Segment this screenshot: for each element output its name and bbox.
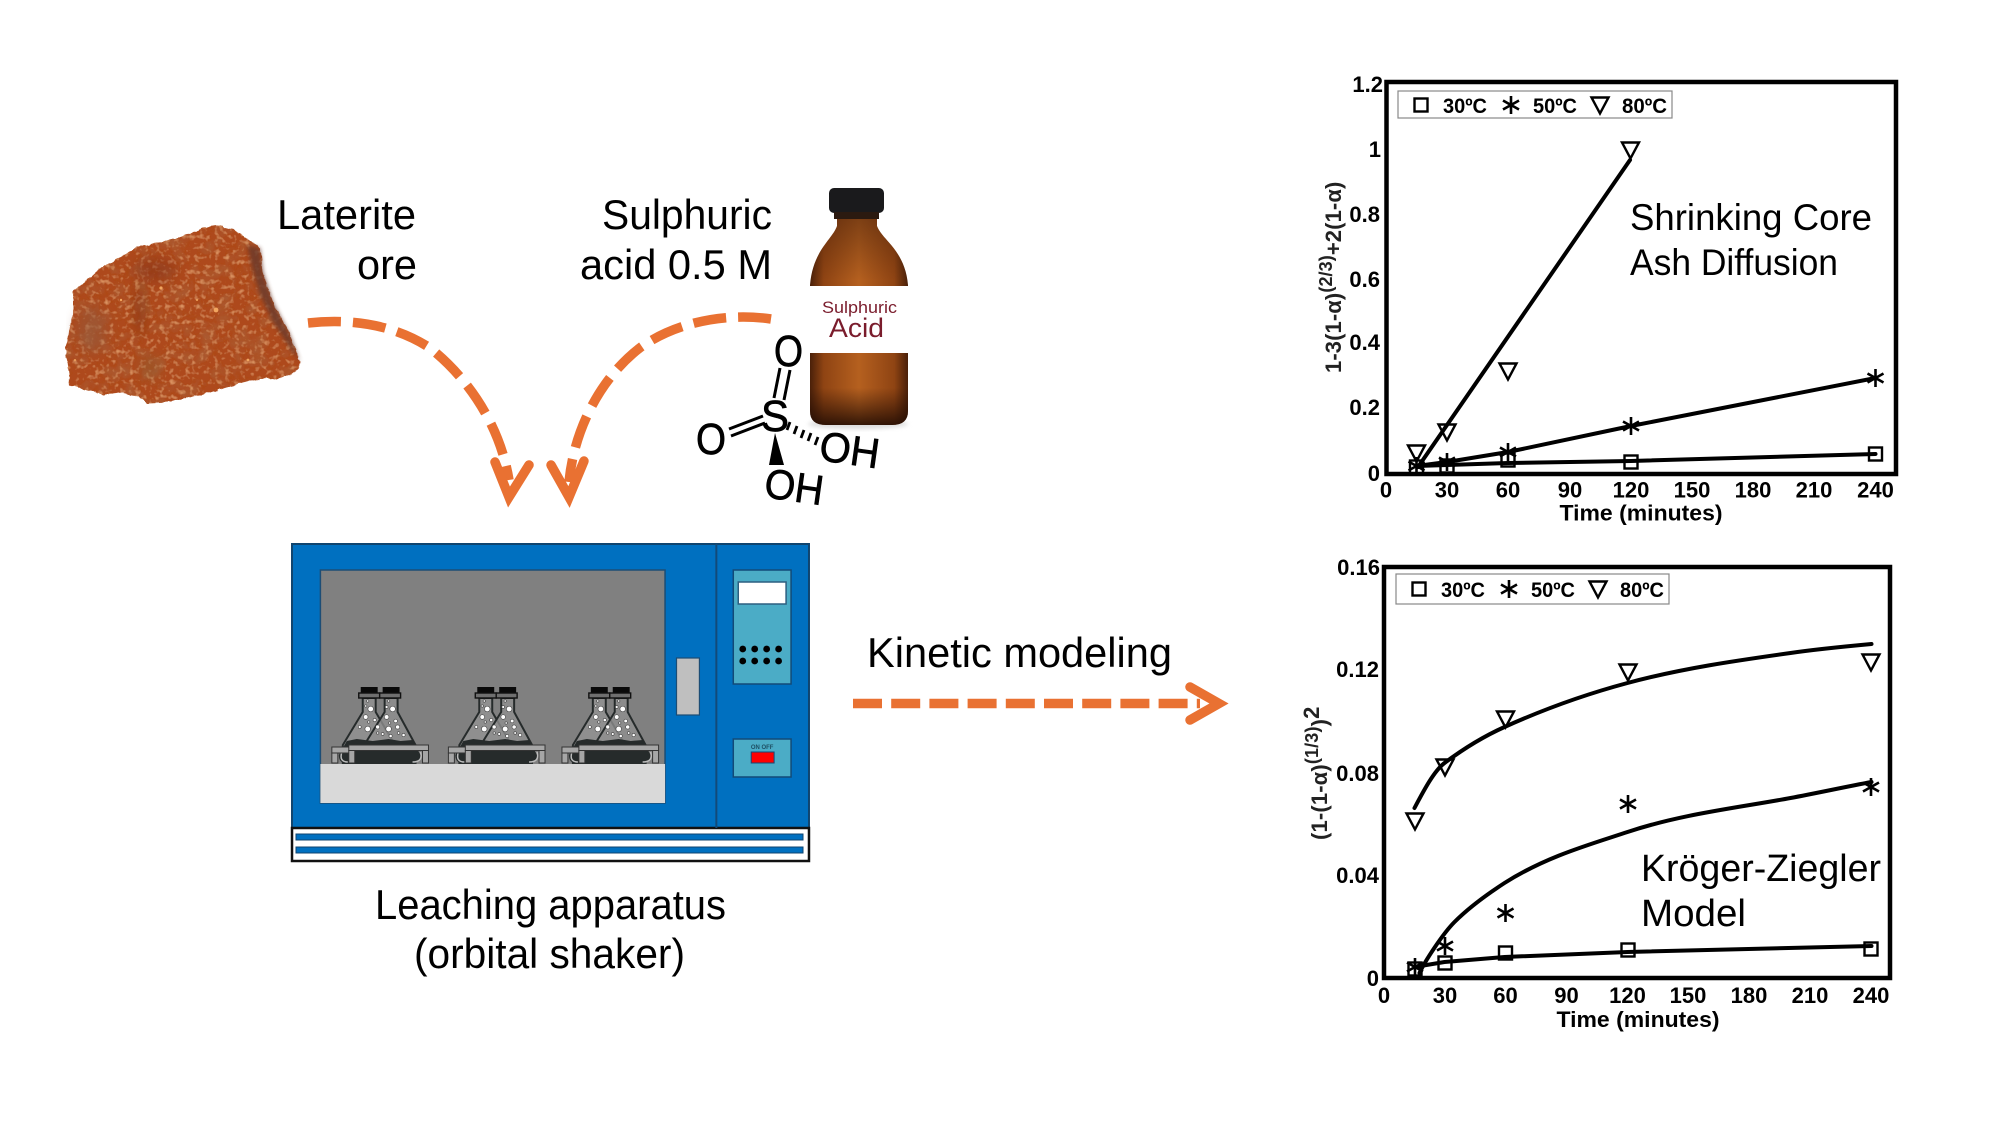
y tick labels: 1 <box>1369 137 1381 162</box>
x tick labels: 150 <box>1670 983 1706 1008</box>
chemical structure: H2SO4: OH <box>762 459 827 514</box>
chart: kroger-ziegler model <box>1299 555 1890 1032</box>
label: sulphuric acid 0.5 M: acid 0.5 M <box>580 241 772 288</box>
x tick labels: 210 <box>1792 983 1828 1008</box>
icon: laterite ore rock <box>65 225 300 403</box>
y axis title: (1-(1-α) <box>1307 764 1332 840</box>
y tick labels <box>1349 72 1383 486</box>
x axis title: Time (minutes) <box>1560 500 1722 526</box>
chemical structure: H2SO4: O <box>774 327 803 376</box>
annotation: model name <box>1630 197 1872 283</box>
legend: 50ºC <box>1533 95 1577 118</box>
y axis title: 1-3(1-α) <box>1321 293 1346 373</box>
series 50C <box>1408 369 1884 475</box>
chemical structure: H2SO4: OH <box>817 422 883 477</box>
on/off switch <box>733 739 791 777</box>
legend: 30ºC <box>1443 95 1487 118</box>
y tick labels: 0.12 <box>1336 657 1379 682</box>
series 80C <box>1408 142 1639 467</box>
y axis title: +2(1-α) <box>1321 182 1346 255</box>
y axis title: (2/3) <box>1316 255 1336 293</box>
x axis title: Time (minutes) <box>1556 1007 1720 1032</box>
annotation: model name: Kröger-Ziegler <box>1641 848 1881 890</box>
label: kinetic modeling: Kinetic modeling <box>867 629 1172 676</box>
x tick labels: 210 <box>1796 478 1832 502</box>
y tick labels: 0 <box>1368 461 1380 486</box>
chamber window <box>320 570 665 803</box>
x tick labels: 60 <box>1496 478 1520 502</box>
arrow: laterite to shaker <box>308 322 529 497</box>
chemical structure: H2SO4: S <box>761 392 789 441</box>
plot frame <box>1384 567 1890 978</box>
x tick labels: 30 <box>1433 983 1457 1008</box>
flask set 2 <box>448 687 545 763</box>
x tick labels: 150 <box>1674 478 1710 502</box>
x tick labels: 120 <box>1613 478 1649 502</box>
y tick labels: 0 <box>1367 966 1379 991</box>
caption: leaching apparatus: Leaching apparatus <box>375 881 726 928</box>
annotation: model name: Ash Diffusion <box>1630 242 1838 283</box>
door handle <box>677 658 699 715</box>
chart: shrinking core ash diffusion <box>1316 72 1896 526</box>
legend: 50ºC <box>1531 579 1575 602</box>
x tick labels: 30 <box>1435 478 1459 502</box>
legend: 80ºC <box>1622 95 1667 118</box>
label: laterite ore <box>277 191 417 288</box>
x tick labels: 120 <box>1609 983 1646 1008</box>
x tick labels: 60 <box>1493 983 1518 1008</box>
x tick labels <box>1380 478 1894 502</box>
chemical structure: H2SO4: O <box>696 415 726 464</box>
legend <box>1396 574 1669 604</box>
x tick labels: 240 <box>1857 478 1894 502</box>
series 30C <box>1408 942 1878 976</box>
caption: leaching apparatus: (orbital shaker) <box>414 930 685 977</box>
flask set 3 <box>562 687 659 763</box>
legend: 80ºC <box>1620 579 1664 602</box>
x tick labels: 90 <box>1558 478 1582 502</box>
on/off switch: ON OFF <box>751 745 774 751</box>
y tick labels <box>1336 555 1380 991</box>
annotation: model name: Model <box>1641 893 1746 935</box>
y tick labels: 0.08 <box>1336 761 1379 786</box>
x tick labels <box>1378 983 1889 1008</box>
base vent band <box>292 828 809 861</box>
icon: sulphuric acid bottle: Acid <box>829 313 884 343</box>
arrow: to kinetic modeling <box>853 687 1219 720</box>
x tick labels: 180 <box>1735 478 1771 502</box>
y tick labels: 0.4 <box>1349 330 1381 355</box>
x tick labels: 90 <box>1554 983 1579 1008</box>
y tick labels: 0.16 <box>1337 555 1380 580</box>
x tick labels: 240 <box>1853 983 1889 1008</box>
series 80C <box>1406 644 1880 830</box>
y tick labels: 0.04 <box>1336 863 1380 888</box>
icon: sulphuric acid bottle: Sulphuric <box>822 298 898 317</box>
arrow: acid to shaker <box>551 317 771 497</box>
x tick labels: 0 <box>1378 983 1390 1008</box>
label: laterite ore: ore <box>357 241 417 288</box>
shaker body <box>292 544 809 828</box>
icon: sulphuric acid bottle <box>808 188 908 429</box>
caption: leaching apparatus <box>375 881 726 977</box>
label: sulphuric acid 0.5 M: Sulphuric <box>602 191 772 238</box>
orbital shaker apparatus <box>292 544 809 861</box>
x tick labels: 0 <box>1380 478 1392 502</box>
chemical structure: H2SO4 <box>696 327 883 514</box>
flask set 1 <box>332 687 428 763</box>
y tick labels: 0.8 <box>1349 202 1380 227</box>
annotation: model name: Shrinking Core <box>1630 197 1872 238</box>
y axis title: 2 <box>1299 707 1324 719</box>
y tick labels: 0.2 <box>1349 395 1380 420</box>
annotation: model name <box>1641 848 1881 935</box>
legend: 30ºC <box>1441 579 1485 602</box>
y axis title: ) <box>1307 719 1332 726</box>
plot frame <box>1386 82 1896 474</box>
control panel <box>716 544 791 828</box>
y tick labels: 1.2 <box>1352 72 1383 97</box>
y axis title: (1/3) <box>1302 726 1322 764</box>
series 30C <box>1410 448 1882 474</box>
label: sulphuric acid 0.5 M <box>580 191 772 288</box>
y tick labels: 0.6 <box>1349 267 1380 292</box>
series 50C <box>1407 778 1879 976</box>
label: laterite ore: Laterite <box>277 191 416 238</box>
x tick labels: 180 <box>1731 983 1767 1008</box>
legend <box>1398 91 1672 118</box>
